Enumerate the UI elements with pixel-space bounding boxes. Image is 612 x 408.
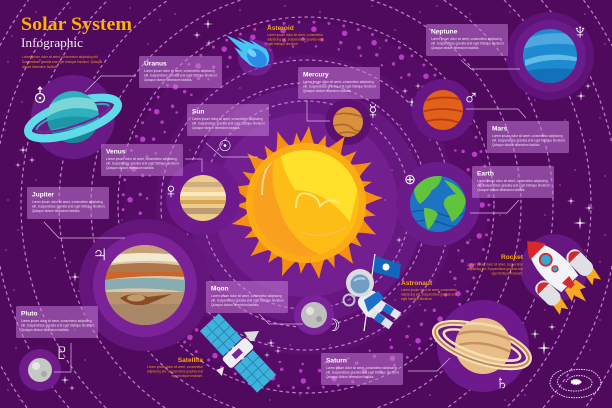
panel: Uranus: elit. Suspendisse gravida erat eget tristique tincidunt. (144, 74, 218, 78)
label: Astronaut: adipiscing elit. Suspendisse gravida erat (401, 292, 457, 296)
label: Asteroid: Asteroid (267, 25, 294, 32)
astronaut (344, 254, 401, 331)
planet: Mercury (325, 99, 371, 145)
panel: Sun: Lorem ipsum dolor sit amet, consectetur adipiscing (192, 117, 263, 121)
planet: Uranus (24, 75, 122, 159)
panel: Sun: elit. Suspendisse gravida erat eget tristique tincidunt. (192, 122, 266, 126)
title: dictum bibendum facilisis. (22, 65, 58, 69)
rocket (503, 217, 611, 325)
galaxy (550, 369, 601, 398)
planet: Earth (396, 162, 480, 246)
panel: Uranus: Quisque dictum bibendum facilisis. (144, 78, 192, 82)
satellite (198, 311, 278, 395)
panel: Earth (472, 166, 554, 198)
planet symbols: ♇ (53, 339, 71, 366)
label: Asteroid: adipiscing elit. Suspendisse gravida erat (267, 38, 323, 42)
panel: Neptune: Neptune (431, 28, 458, 36)
planet symbols: ♀ (163, 178, 179, 203)
panel: Earth: Quisque dictum bibendum facilisis. (477, 188, 525, 192)
planet symbols: ♄ (494, 372, 510, 394)
panel: Mars: Lorem ipsum dolor sit amet, consectetur adipiscing (492, 134, 563, 138)
planet symbols: ♃ (92, 241, 108, 266)
label: Satellite: eget tristique tincidunt. (172, 374, 203, 378)
label: Astronaut: eget tristique tincidunt. (401, 297, 433, 301)
planet symbols: ☿ (365, 99, 381, 124)
panel: Venus (101, 144, 183, 176)
title: Solar System (21, 14, 132, 35)
leader lines (44, 60, 526, 372)
label: Astronaut: Lorem ipsum dolor sit amet, consectetur (401, 288, 457, 292)
panel: Jupiter: Jupiter (32, 192, 54, 198)
panel: Mars: Quisque dictum bibendum facilisis. (492, 143, 540, 147)
panel: Saturn: Quisque dictum bibendum facilisis. (326, 375, 374, 379)
panel: Venus: Venus (106, 148, 126, 156)
icon: Uranus symbol (36, 87, 44, 102)
panel: Moon (206, 281, 288, 313)
planet symbols: ♂ (463, 85, 479, 110)
label: Asteroid: eget tristique tincidunt. (267, 42, 299, 46)
panel: Pluto: Lorem ipsum dolor sit amet, consectetur adipiscing (21, 319, 92, 323)
label: Rocket: adipiscing elit. Suspendisse gravida erat (467, 267, 523, 271)
planet symbols: ☉ (218, 138, 232, 155)
panel: Sun: Quisque dictum bibendum facilisis. (192, 126, 240, 130)
label: Asteroid (267, 25, 323, 46)
panel: Neptune: Lorem ipsum dolor sit amet, consectetur adipiscing (431, 37, 502, 41)
panel: Mercury: elit. Suspendisse gravida erat eget tristique tincidunt. (303, 84, 377, 88)
panel: Pluto (16, 306, 98, 338)
panel: Saturn: Saturn (326, 358, 347, 364)
label: Satellite: adipiscing elit. Suspendisse gravida erat (147, 370, 203, 374)
panel: Pluto: Pluto (21, 310, 37, 318)
panel: Saturn: Lorem ipsum dolor sit amet, consectetur adipiscing (326, 366, 397, 370)
label: Asteroid: Lorem ipsum dolor sit amet, consectetur (267, 33, 323, 37)
panel: Pluto: Quisque dictum bibendum facilisis. (21, 328, 69, 332)
panel: Neptune (426, 24, 508, 56)
title: Suspendisse gravida erat eget tristique tincidunt. Quisque (22, 60, 103, 64)
panel: Mars: elit. Suspendisse gravida erat eget tristique tincidunt. (492, 138, 566, 142)
panel: Venus: elit. Suspendisse gravida erat eget tristique tincidunt. (106, 162, 180, 166)
panel: Pluto: elit. Suspendisse gravida erat eget tristique tincidunt. (21, 324, 95, 328)
panel: Moon: Moon (211, 286, 229, 292)
planet: Neptune (506, 12, 594, 100)
panel: Neptune: elit. Suspendisse gravida erat eget tristique tincidunt. (431, 42, 505, 46)
title: Lorem ipsum dolor sit amet, consectetur adipiscing elit. (22, 55, 99, 59)
planet: Moon (294, 295, 334, 335)
panel: Earth: elit. Suspendisse gravida erat eget tristique tincidunt. (477, 184, 551, 188)
asteroid (226, 35, 274, 76)
panel: Mars (487, 121, 569, 153)
panel: Uranus (139, 56, 222, 88)
planet: Venus (166, 161, 240, 235)
panel: Sun: Sun (192, 108, 204, 116)
panel: Sun (187, 104, 269, 136)
orbit bands around the sun (124, 23, 488, 387)
panel: Mars: Mars (492, 126, 508, 132)
planet symbols: ♆ (572, 19, 588, 44)
title: Infographic (21, 36, 83, 50)
label: Rocket: Lorem ipsum dolor sit amet, consectetur (467, 262, 523, 266)
planet: Jupiter (79, 219, 211, 351)
panel: Mercury: Mercury (303, 72, 329, 78)
panel: Moon: Lorem ipsum dolor sit amet, consectetur adipiscing (211, 294, 282, 298)
label: Rocket: Rocket (501, 254, 524, 261)
label: Rocket: eget tristique tincidunt. (492, 272, 523, 276)
panel: Earth: Lorem ipsum dolor sit amet, consectetur adipiscing (477, 179, 548, 183)
panel: Moon: elit. Suspendisse gravida erat eget tristique tincidunt. (211, 298, 285, 302)
label: Satellite: Lorem ipsum dolor sit amet, consectetur (147, 365, 203, 369)
panel: Mercury: Lorem ipsum dolor sit amet, consectetur adipiscing (303, 80, 374, 84)
panel: Earth: Earth (477, 170, 494, 178)
label: Rocket (467, 254, 524, 276)
satellite dish (244, 331, 259, 341)
panel: Venus: Quisque dictum bibendum facilisis. (106, 166, 154, 170)
panel: Jupiter: elit. Suspendisse gravida erat eget tristique tincidunt. (32, 204, 106, 208)
planet: Mars (412, 79, 474, 141)
panel: Neptune: Quisque dictum bibendum facilisis. (431, 46, 479, 50)
panel: Uranus: Uranus (144, 60, 167, 68)
planet: Pluto (19, 349, 61, 391)
panel: Saturn: elit. Suspendisse gravida erat eget tristique tincidunt. (326, 370, 400, 374)
label: Satellite (147, 357, 203, 378)
panel: Mercury: Quisque dictum bibendum facilisis. (303, 89, 351, 93)
panel: Venus: Lorem ipsum dolor sit amet, consectetur adipiscing (106, 157, 177, 161)
panel: Mercury (298, 67, 380, 99)
panel: Saturn (321, 353, 403, 385)
the Sun (228, 126, 384, 281)
panel: Jupiter: Quisque dictum bibendum facilisis. (32, 209, 80, 213)
label: Satellite: Satellite (178, 357, 203, 364)
panel: Jupiter (27, 187, 109, 219)
panel: Moon: Quisque dictum bibendum facilisis. (211, 303, 259, 307)
planet symbols: ☽ (325, 316, 341, 335)
label: Astronaut (401, 280, 457, 301)
planet symbols: ⊕ (404, 171, 416, 187)
planet: Saturn (430, 300, 534, 392)
title (21, 14, 132, 69)
panel: Uranus: Lorem ipsum dolor sit amet, consectetur adipiscing (144, 69, 215, 73)
label: Astronaut: Astronaut (401, 280, 433, 287)
asteroid belt dots (123, 22, 489, 388)
panel: Jupiter: Lorem ipsum dolor sit amet, consectetur adipiscing (32, 200, 103, 204)
small dish (216, 367, 224, 376)
